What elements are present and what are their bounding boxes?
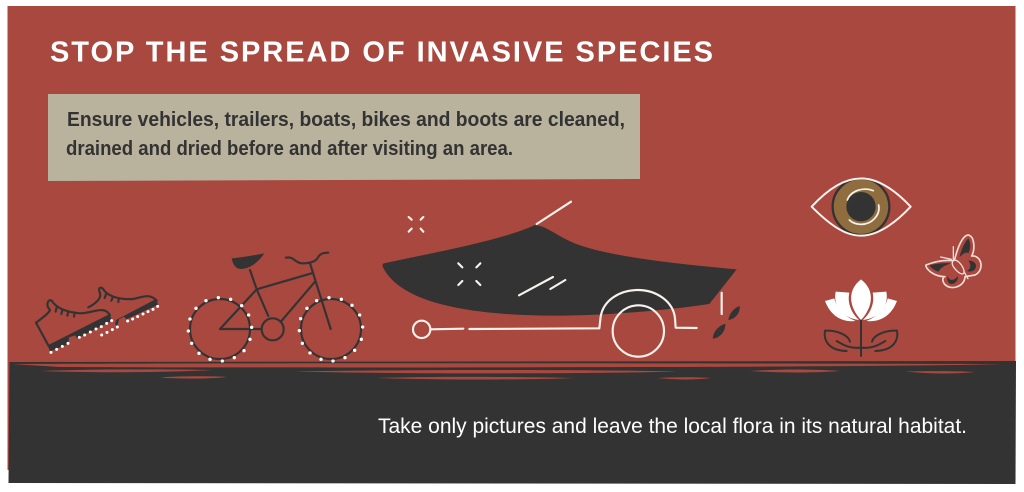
icon: butterfly bbox=[926, 235, 981, 288]
bottom text: Take only pictures and leave the local flora in its natural habitat. bbox=[378, 415, 967, 438]
icon: lotus flower bbox=[825, 279, 897, 356]
icon: bicycle bbox=[187, 253, 364, 363]
callout: cleaning instructions bbox=[48, 94, 640, 181]
callout: cleaning instructions: Ensure vehicles, trailers, boats, bikes and boots are cleaned, bbox=[67, 109, 625, 131]
icon: boat on trailer bbox=[382, 202, 740, 357]
title: STOP THE SPREAD OF INVASIVE SPECIES bbox=[50, 36, 713, 68]
icon: boots bbox=[36, 288, 159, 354]
callout: cleaning instructions: drained and dried before and after visiting an area. bbox=[66, 138, 513, 160]
icon: eye bbox=[812, 178, 911, 236]
panel: dark ground bbox=[8, 361, 1016, 484]
